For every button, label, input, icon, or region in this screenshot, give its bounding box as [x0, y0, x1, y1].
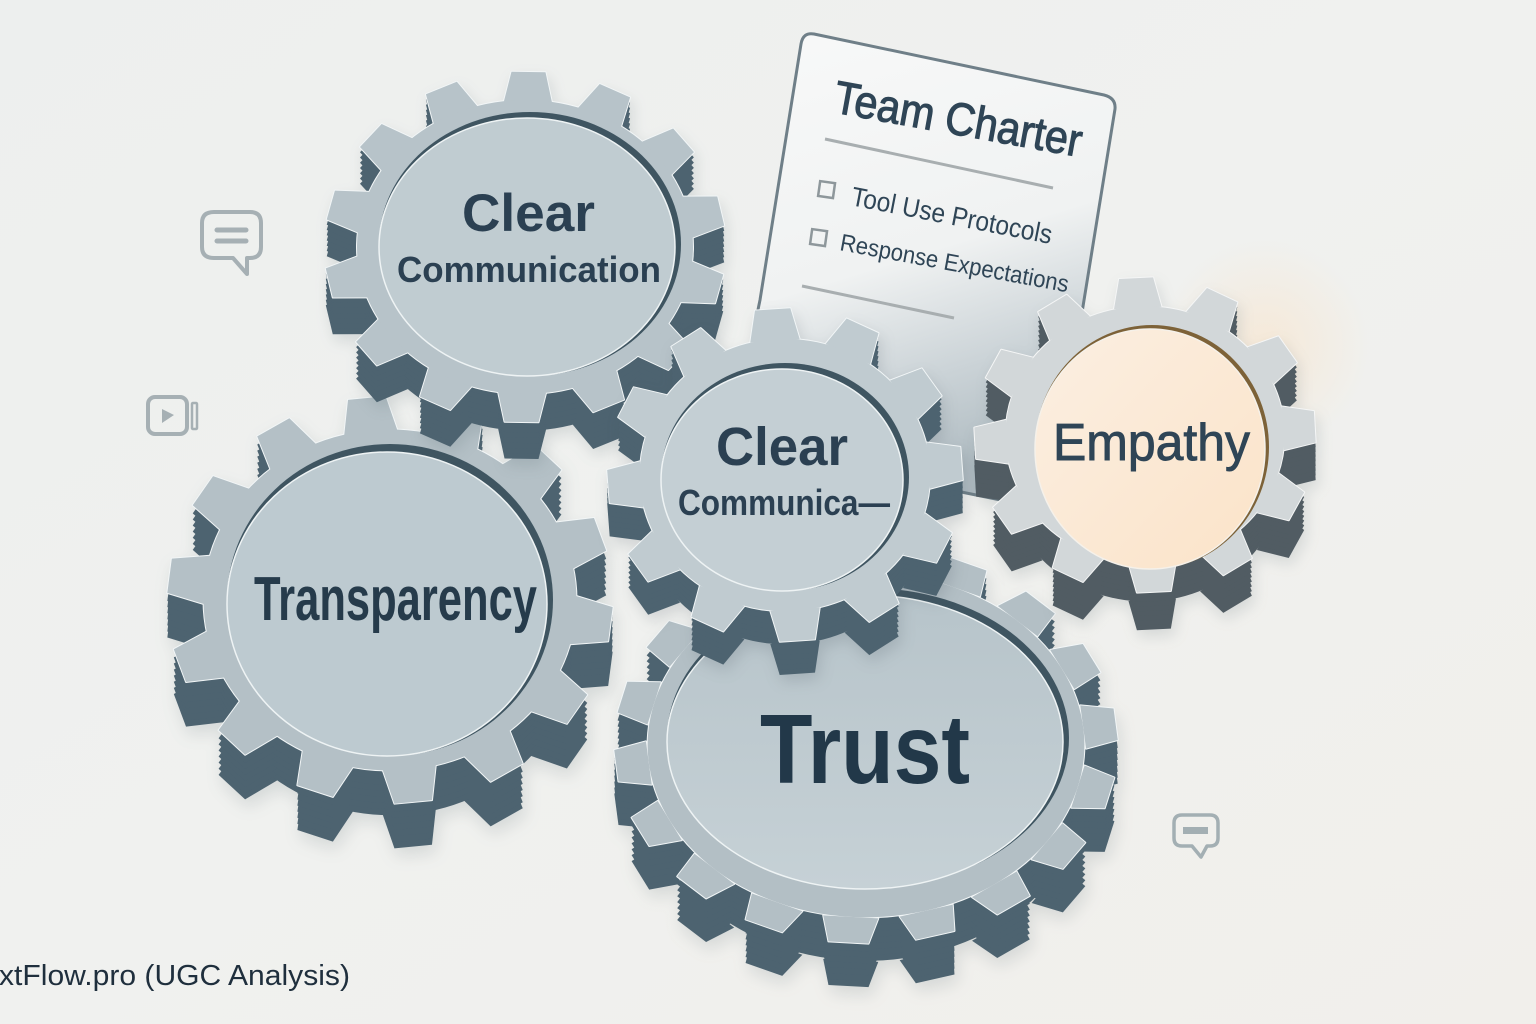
- gear: clear communication large: [321, 69, 729, 462]
- label: communication: Communication: [397, 249, 661, 290]
- label: empathy: Empathy: [1053, 414, 1250, 472]
- source credit: xtFlow.pro (UGC Analysis): [0, 960, 350, 992]
- heading: team charter: Team Charter: [830, 71, 1086, 167]
- icon: video play: [148, 397, 197, 434]
- gear: clear communica: [596, 298, 974, 685]
- label: transparency: Transparency: [254, 565, 537, 634]
- icon: small chat bubble: [1174, 815, 1218, 857]
- panel: team charter card: [730, 34, 1115, 510]
- gear: trust: [597, 534, 1135, 1000]
- label: communica: Communica—: [678, 482, 890, 523]
- divider under heading: [825, 139, 1053, 188]
- gear: transparency: [146, 377, 634, 868]
- label: clear: Clear: [462, 184, 595, 243]
- label: trust: Trust: [760, 694, 970, 804]
- warm glow behind empathy gear: [1160, 240, 1370, 450]
- item: tool use protocols: Tool Use Protocols: [849, 181, 1055, 250]
- checkbox: tool use: [818, 181, 835, 198]
- gear: empathy: [966, 270, 1324, 638]
- divider lower: [802, 286, 954, 318]
- label: clear: Clear: [716, 417, 848, 477]
- checkbox: response expectations: [810, 229, 827, 246]
- icon: chat bubble with lines: [202, 212, 261, 274]
- item: response expectations: Response Expectations: [838, 229, 1071, 298]
